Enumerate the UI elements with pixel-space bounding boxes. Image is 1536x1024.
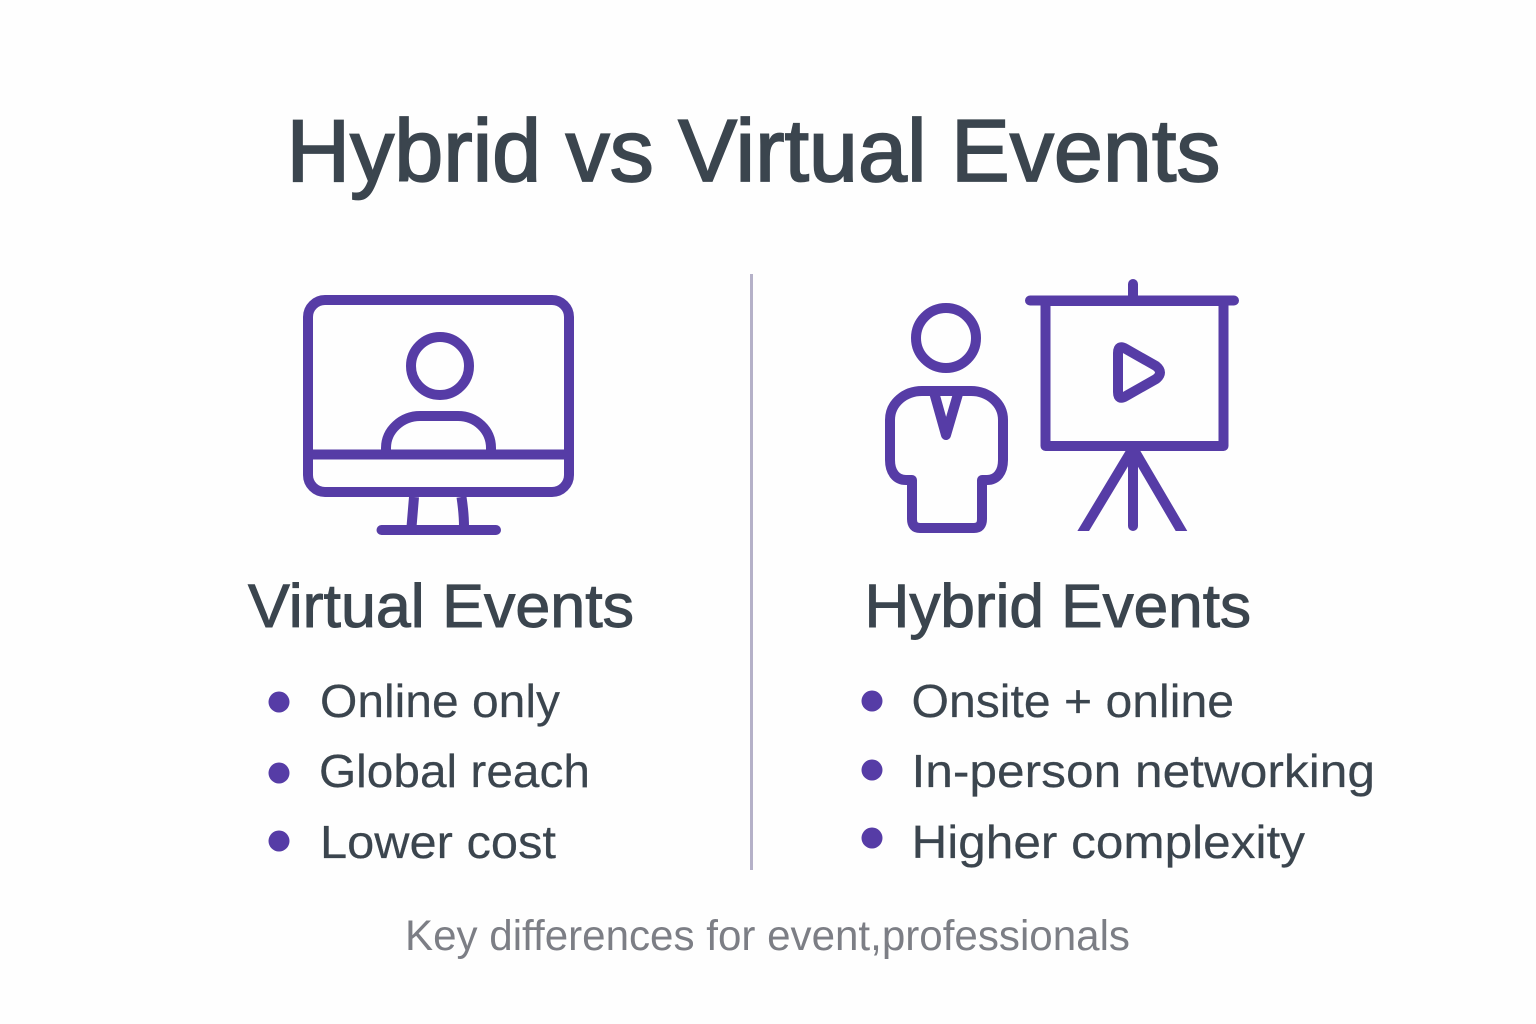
bullet: onsite + online: Onsite + online (912, 675, 1234, 727)
bullet: lower cost: Lower cost (320, 816, 556, 868)
list: virtual features (268, 675, 590, 868)
heading: virtual events: Virtual Events (248, 572, 634, 640)
bullet: in-person networking: In-person networking (912, 745, 1375, 797)
list: hybrid features (862, 675, 1375, 868)
heading: hybrid events: Hybrid Events (864, 572, 1251, 640)
center divider (750, 274, 753, 870)
title: Hybrid vs Virtual Events (286, 101, 1220, 200)
panel: virtual events (248, 300, 634, 868)
panel: hybrid events (862, 284, 1375, 868)
icon: presenter with screen (890, 284, 1234, 538)
bullet: higher complexity: Higher complexity (912, 816, 1306, 868)
bullet: global reach: Global reach (319, 745, 590, 797)
footer caption: Key differences for event,professionals (405, 912, 1130, 960)
icon: monitor with presenter (308, 300, 569, 530)
bullet: online only: Online only (320, 675, 561, 727)
